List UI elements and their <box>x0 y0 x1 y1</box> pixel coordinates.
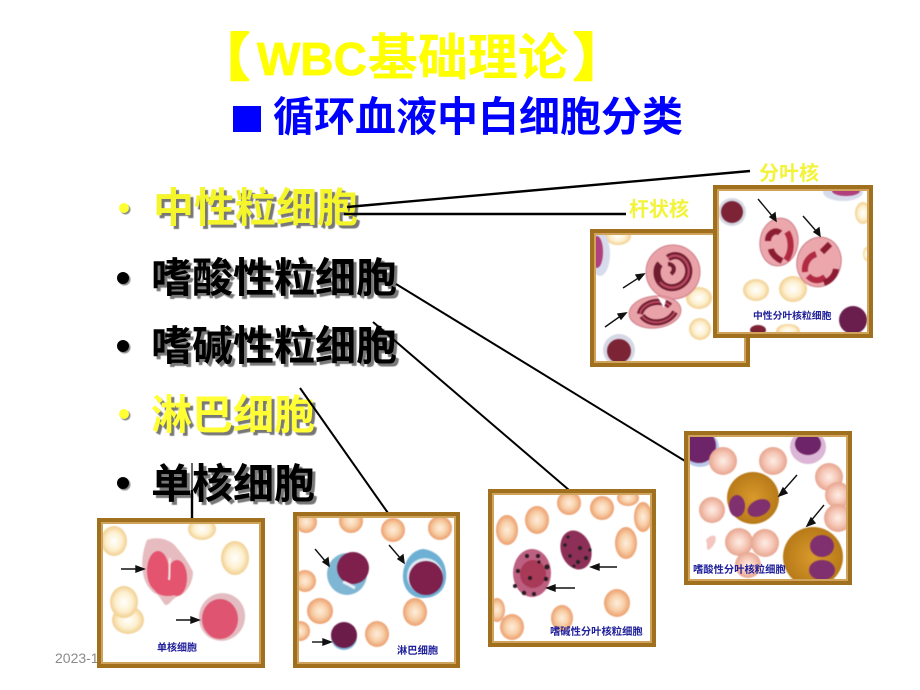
list item: basophil: 嗜碱性粒细胞 <box>151 323 397 369</box>
diagram: connector lines and cell micrographs <box>97 162 873 668</box>
arrows <box>758 199 820 236</box>
caption: 嗜酸性分叶核粒细胞 <box>693 563 786 576</box>
title: 【WBC基础理论】 <box>199 30 624 86</box>
arrows <box>779 475 824 526</box>
arrows <box>547 564 617 591</box>
list item: lymphocyte: 淋巴细胞 <box>151 392 315 438</box>
list item: neutrophil: 中性粒细胞 <box>153 185 358 231</box>
panel: segmented neutrophil <box>713 183 873 338</box>
connector: neutrophil to band <box>344 213 626 215</box>
arrows <box>312 545 404 645</box>
panel: basophil <box>488 489 656 647</box>
label: band nucleus: 杆状核 <box>629 197 689 221</box>
caption: 中性分叶核粒细胞 <box>753 309 832 322</box>
caption: 单核细胞 <box>157 641 197 654</box>
connector: basophil <box>373 322 569 490</box>
date footer: 2023-1 <box>55 650 99 666</box>
caption: 淋巴细胞 <box>397 644 439 657</box>
panel: lymphocyte <box>290 509 460 668</box>
connector: lymphocyte <box>300 388 388 513</box>
arrows <box>121 566 199 623</box>
caption: 嗜碱性分叶核粒细胞 <box>550 625 643 638</box>
list item: eosinophil: 嗜酸性粒细胞 <box>151 255 397 301</box>
connector: monocyte <box>191 463 193 519</box>
connector: eosinophil <box>396 284 685 461</box>
panel: eosinophil <box>681 429 852 587</box>
arrows <box>605 274 644 327</box>
label: segmented nucleus: 分叶核 <box>759 161 819 185</box>
panel: band neutrophil <box>590 227 750 367</box>
list item: monocyte: 单核细胞 <box>151 461 315 507</box>
panel: monocyte <box>97 518 265 668</box>
connector: neutrophil to segmented <box>347 171 750 207</box>
subtitle: 循环血液中白细胞分类 <box>273 94 683 140</box>
